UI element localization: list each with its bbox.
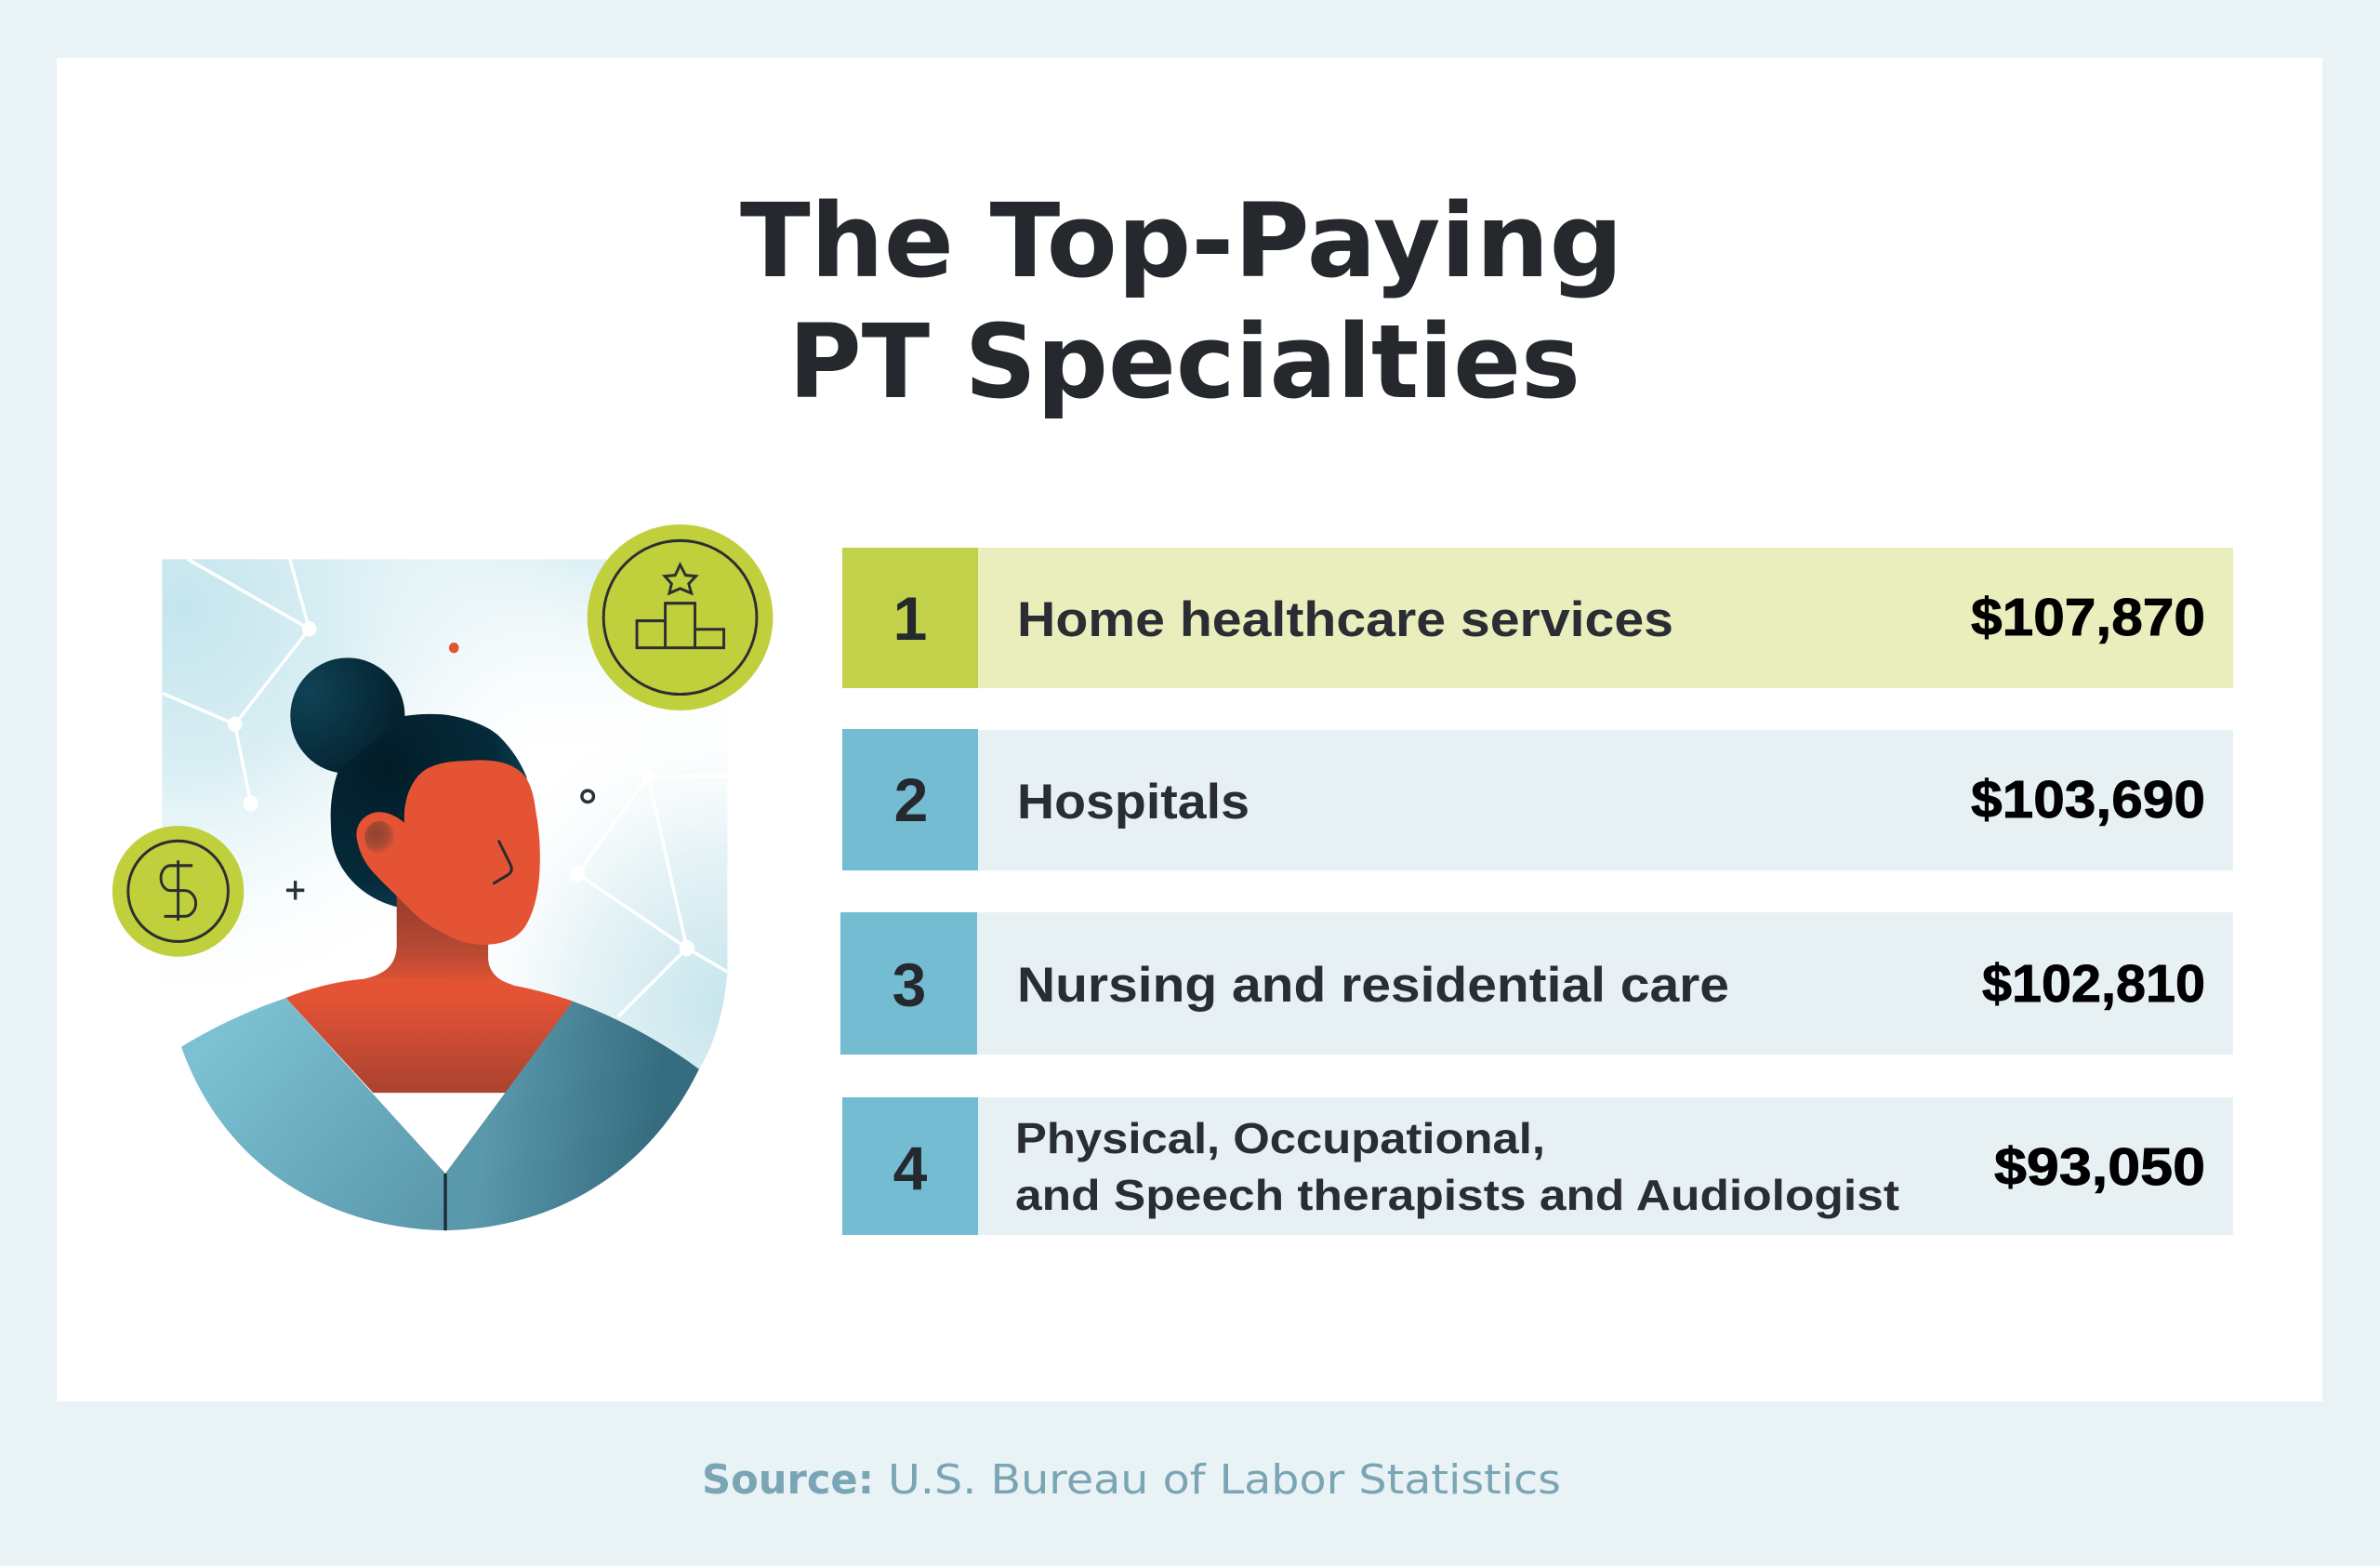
- row 4: [842, 1097, 2233, 1235]
- title: PT Specialties: [788, 302, 1580, 421]
- row 3: [840, 912, 2233, 1055]
- row 4: and Speech therapists and Audiologist: [1015, 1171, 1899, 1219]
- row 1: $107,870: [1971, 588, 2205, 647]
- row 3: 3: [892, 950, 926, 1019]
- source line: Source:: [702, 1456, 874, 1504]
- title: The Top-Paying: [740, 181, 1623, 300]
- neck: [364, 894, 514, 986]
- chest: [285, 979, 573, 1093]
- row 4: 4: [893, 1134, 928, 1202]
- row 2: $103,690: [1971, 770, 2205, 829]
- face and ear: [356, 760, 540, 945]
- row 1: 1: [893, 584, 927, 653]
- row 4: Physical, Occupational,: [1015, 1114, 1545, 1162]
- decorative plus: [286, 881, 304, 900]
- icon: dollar coin: [112, 826, 244, 957]
- row 2: Hospitals: [1017, 775, 1250, 829]
- hair: [331, 714, 527, 907]
- decorative red dot: [449, 643, 459, 653]
- icon: podium coin: [588, 524, 773, 710]
- row 1: Home healthcare services: [1017, 592, 1673, 647]
- inner ear: [364, 821, 394, 855]
- row 1: [842, 548, 2233, 688]
- shield background with network lines: [162, 559, 727, 1069]
- row 3: $102,810: [1982, 954, 2205, 1014]
- left lapel: [181, 998, 445, 1230]
- row 2: 2: [894, 765, 928, 834]
- illustration: therapist portrait with coins: [112, 524, 773, 1233]
- row 3: Nursing and residential care: [1017, 958, 1729, 1013]
- hair bun: [290, 657, 404, 774]
- title: [740, 181, 1623, 421]
- decorative ring: [582, 790, 594, 802]
- right lapel: [445, 1002, 699, 1230]
- row 4: $93,050: [1994, 1137, 2205, 1197]
- row 2: [842, 729, 2233, 870]
- person: [181, 657, 699, 1230]
- source line: U.S. Bureau of Labor Statistics: [888, 1456, 1561, 1504]
- center seam: [443, 1174, 449, 1230]
- ranking rows: [840, 548, 2233, 1235]
- nose: [494, 842, 511, 883]
- white undershirt: [373, 1093, 507, 1174]
